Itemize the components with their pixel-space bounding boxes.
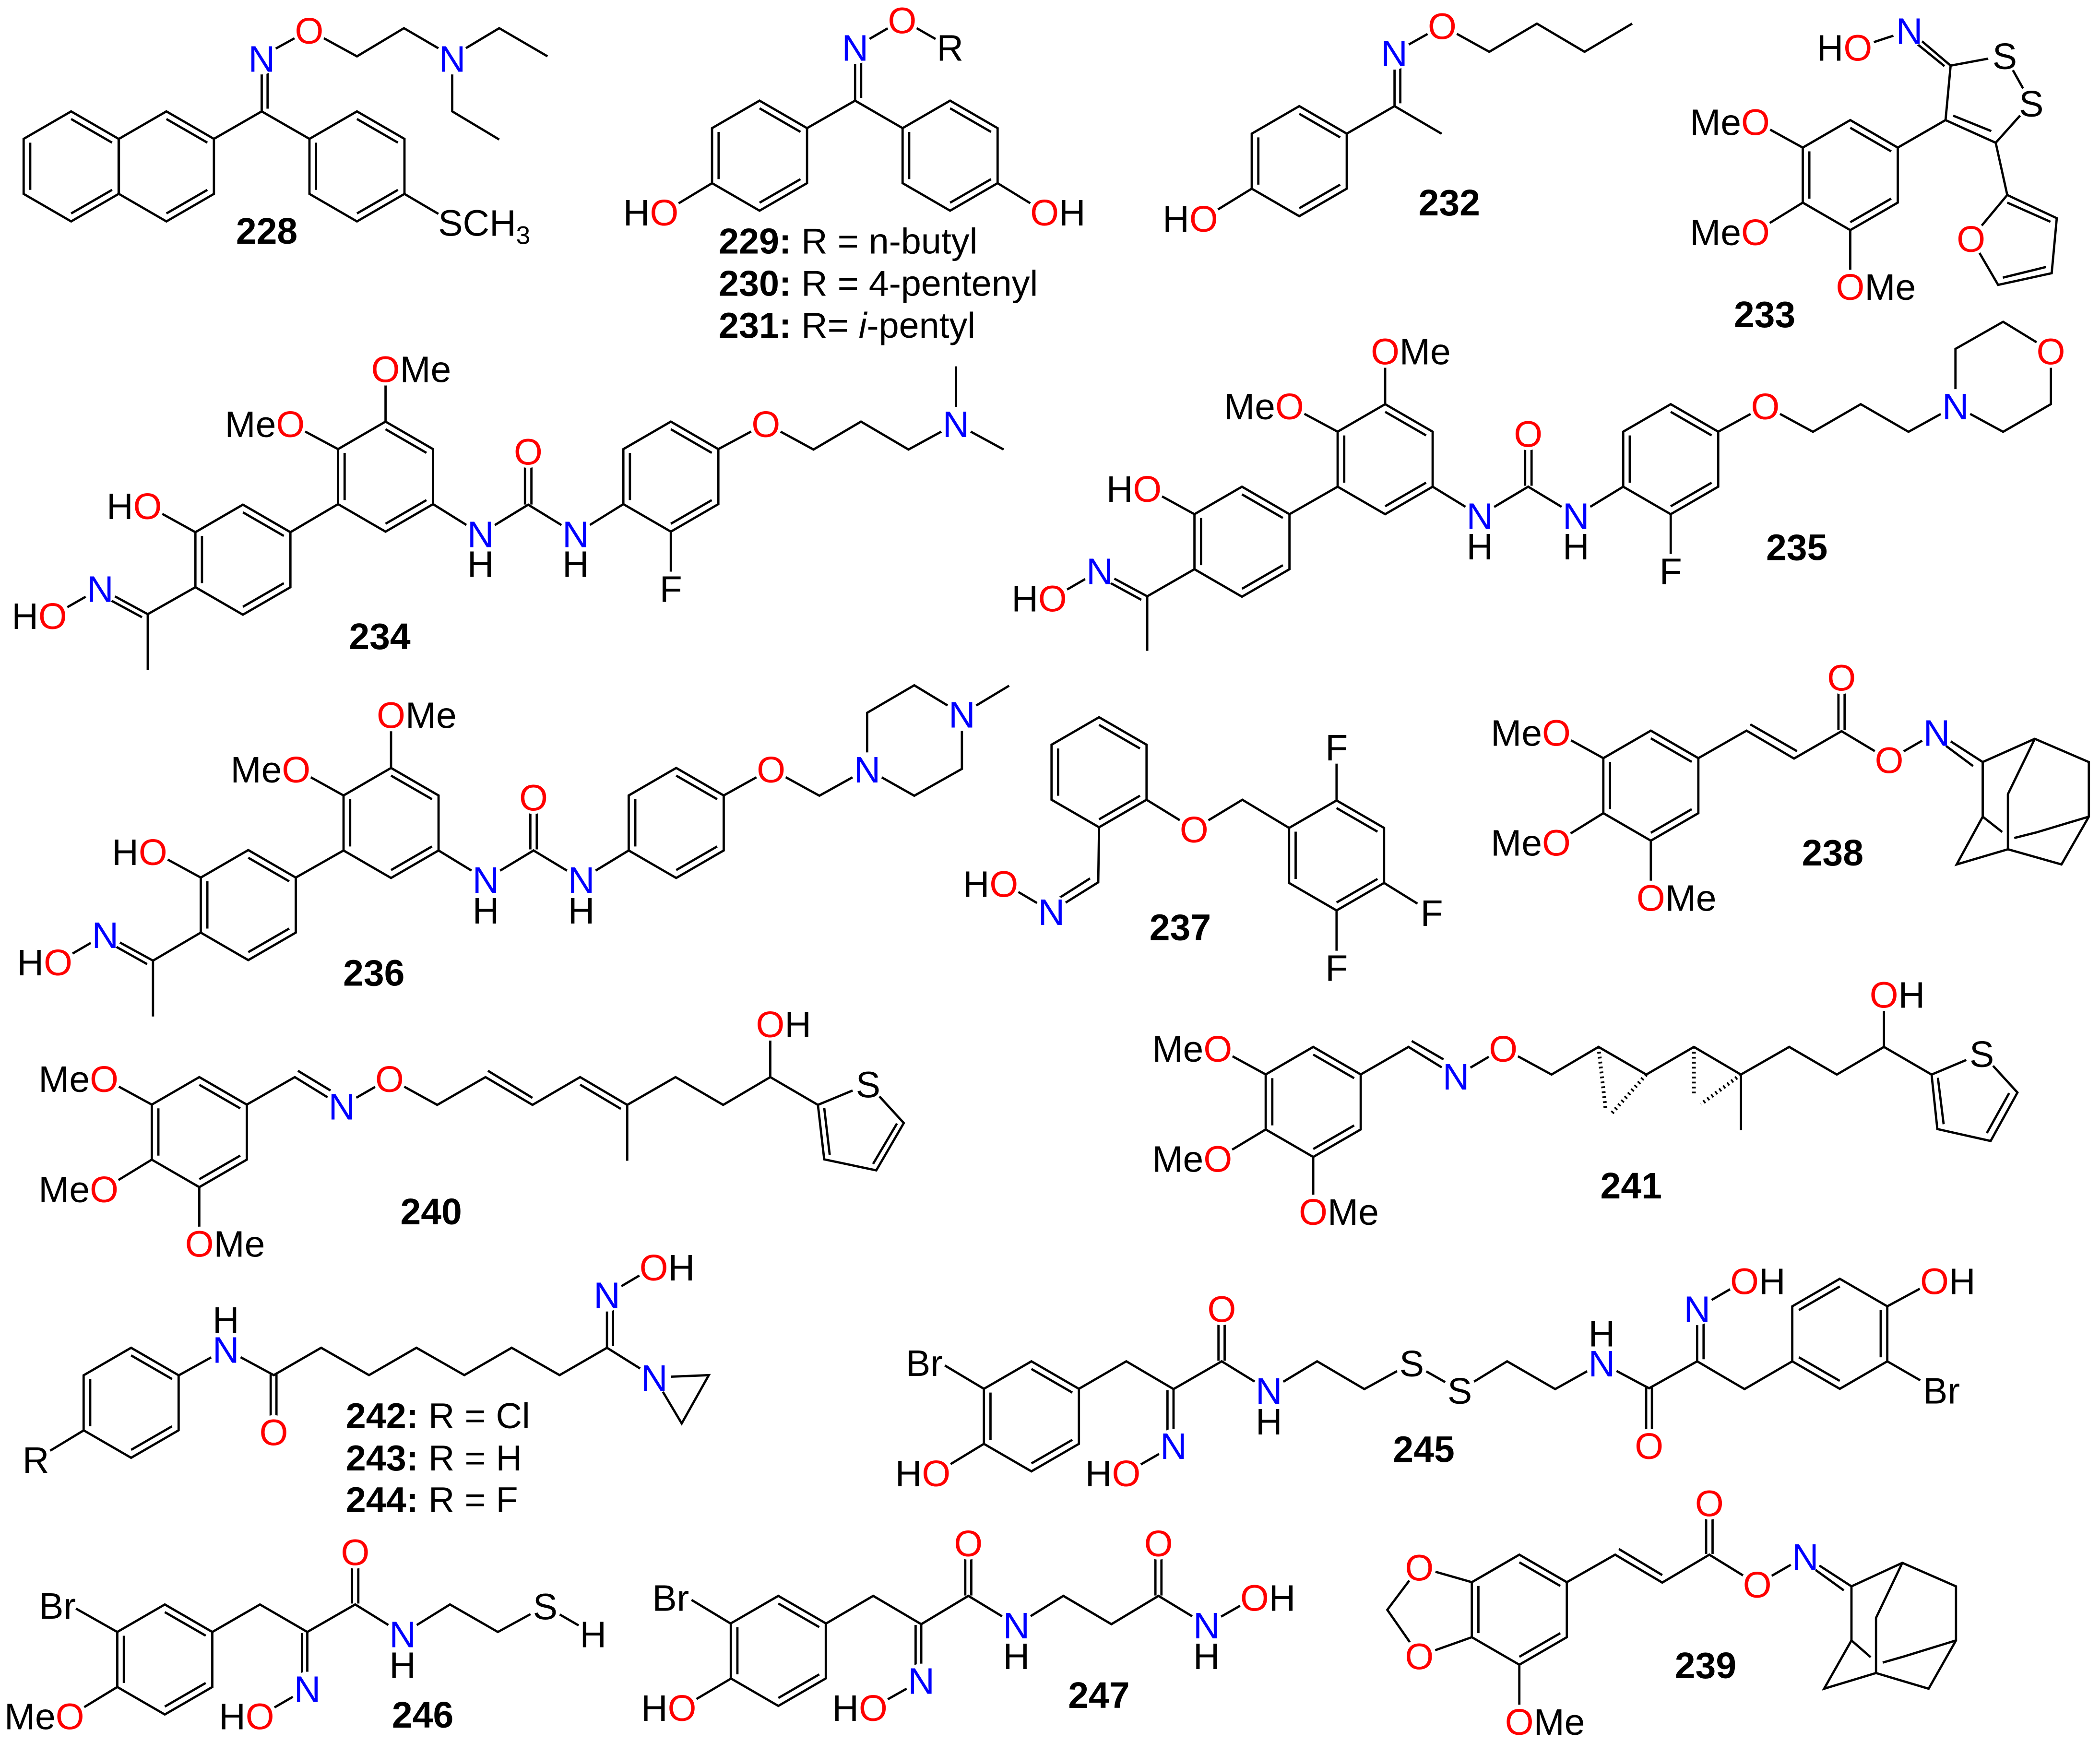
atom labels of 233: MeO xyxy=(1690,102,1770,143)
atom labels of 232 xyxy=(1163,6,1457,240)
atom labels of 239 xyxy=(1405,1483,1819,1742)
atom labels of 229-231: OH xyxy=(1030,192,1086,234)
atom labels of 233: N xyxy=(1896,11,1922,52)
atom labels of 236: O xyxy=(757,749,785,791)
atom labels of 234 xyxy=(12,349,969,637)
atom labels of 236: OMe xyxy=(377,695,457,736)
bonds of 233 xyxy=(1756,30,2057,286)
compound legend 229-231: 229: R = n-butyl xyxy=(719,222,977,262)
atom labels of 235: O xyxy=(1514,414,1542,455)
atom labels of 239: O xyxy=(1743,1564,1772,1606)
atom labels of 240: OH xyxy=(756,1004,811,1045)
compound legend 242-244: 243: R = H xyxy=(346,1438,522,1479)
compound number 246: 246 xyxy=(392,1695,453,1736)
compound legend 229-231 xyxy=(719,222,1038,346)
atom labels of 236: N xyxy=(568,860,594,901)
atom labels of 235: N xyxy=(1466,496,1493,537)
atom labels of 234: H xyxy=(562,544,589,585)
atom labels of 235: H xyxy=(1466,526,1493,568)
atom labels of 228 xyxy=(249,11,530,249)
atom labels of 235: HO xyxy=(1011,578,1067,619)
molecule 242-244 xyxy=(19,1247,709,1520)
molecule 241 xyxy=(1152,975,2017,1233)
cyclopropane hashed bonds xyxy=(1599,1047,1741,1113)
atom labels of 228: SCH xyxy=(438,203,516,244)
atom labels of 240: OMe xyxy=(185,1224,265,1265)
atom labels of 242-244: H xyxy=(213,1300,239,1341)
molecule 236 xyxy=(17,685,1009,1017)
atom labels of 246: H xyxy=(389,1645,416,1686)
compound number 235: 235 xyxy=(1766,527,1827,568)
atom labels of 242-244: OH xyxy=(640,1247,695,1289)
atom labels of 247: N xyxy=(908,1661,935,1702)
atom labels of 228: N xyxy=(439,39,465,80)
atom labels of 233: MeO xyxy=(1690,212,1770,253)
atom labels of 245: S xyxy=(1400,1343,1424,1385)
atom labels of 246 xyxy=(4,1532,606,1737)
atom labels of 246: HO xyxy=(219,1696,274,1737)
compound number 240: 240 xyxy=(401,1191,462,1232)
atom labels of 234: N xyxy=(87,569,114,610)
atom labels of 236: MeO xyxy=(231,749,310,791)
atom labels of 241: O xyxy=(1489,1029,1518,1070)
atom labels of 235: F xyxy=(1660,551,1682,593)
atom labels of 247: HO xyxy=(832,1688,888,1729)
atom labels of 246: S xyxy=(533,1587,558,1628)
atom labels of 241: S xyxy=(1969,1034,1994,1075)
compound number 237: 237 xyxy=(1150,907,1211,948)
atom labels of 234: OMe xyxy=(371,349,451,391)
atom labels of 241: N xyxy=(1443,1056,1469,1098)
atom labels of 234: O xyxy=(751,404,780,445)
atom labels of 235: N xyxy=(1563,496,1590,537)
atom labels of 236: H xyxy=(568,890,594,932)
bonds of 235 xyxy=(1053,322,2051,651)
atom labels of 245: OH xyxy=(1920,1261,1976,1303)
atom labels of 228: 3 xyxy=(516,221,530,249)
atom labels of 247: HO xyxy=(641,1688,697,1729)
molecule 232 xyxy=(1163,6,1632,240)
atom labels of 247: H xyxy=(1003,1636,1030,1677)
compound number 238: 238 xyxy=(1802,832,1863,874)
atom labels of 237 xyxy=(963,727,1443,989)
atom labels of 245: N xyxy=(1589,1343,1615,1385)
atom labels of 239: O xyxy=(1695,1483,1724,1525)
atom labels of 247: N xyxy=(1193,1605,1220,1647)
atom labels of 245: O xyxy=(1207,1289,1236,1330)
compound legend 242-244 xyxy=(346,1396,530,1520)
atom labels of 235: OMe xyxy=(1371,332,1451,373)
molecule 228 xyxy=(24,11,547,252)
bonds of 242-244 xyxy=(36,1267,709,1459)
atom labels of 234: N xyxy=(943,404,969,445)
atom labels of 233: HO xyxy=(1817,28,1872,69)
molecule 246 xyxy=(4,1532,610,1737)
atom labels of 239: O xyxy=(1405,1548,1434,1589)
atom labels of 237: HO xyxy=(963,864,1018,905)
atom labels of 229-231: HO xyxy=(623,192,678,234)
compound legend 242-244: 242: R = Cl xyxy=(346,1396,530,1436)
atom labels of 232: O xyxy=(1428,6,1457,47)
atom labels of 229-231 xyxy=(623,0,1086,234)
bonds of 238 xyxy=(1556,677,2089,898)
atom labels of 234: N xyxy=(467,514,494,556)
atom labels of 234: MeO xyxy=(225,404,305,445)
compound legend 229-231: 230: R = 4-pentenyl xyxy=(719,264,1038,304)
atom labels of 245: O xyxy=(1635,1426,1663,1467)
compound legend 242-244: 244: R = F xyxy=(346,1480,518,1520)
atom labels of 234: F xyxy=(660,569,682,610)
atom labels of 232: N xyxy=(1381,33,1408,74)
compound number 236: 236 xyxy=(343,952,404,994)
atom labels of 238: MeO xyxy=(1491,823,1571,864)
atom labels of 236: O xyxy=(519,778,548,819)
molecule 245 xyxy=(895,1261,1976,1494)
atom labels of 236 xyxy=(17,695,975,984)
atom labels of 236: H xyxy=(473,890,499,932)
atom labels of 235: H xyxy=(1563,526,1590,568)
atom labels of 241: OMe xyxy=(1299,1192,1379,1233)
atom labels of 240: S xyxy=(856,1065,880,1106)
atom labels of 247: O xyxy=(1144,1523,1173,1564)
atom labels of 235: HO xyxy=(1106,469,1162,510)
compound number 247: 247 xyxy=(1068,1675,1130,1716)
bonds of 247 xyxy=(682,1543,1255,1707)
atom labels of 235: MeO xyxy=(1224,386,1304,427)
atom labels of 246: H xyxy=(580,1614,606,1656)
atom labels of 232: HO xyxy=(1163,199,1218,240)
atom labels of 242-244: O xyxy=(260,1412,288,1454)
atom labels of 233: O xyxy=(1957,219,1985,260)
compound legend 229-231: 231: R= i-pentyl xyxy=(719,306,975,346)
compound number 233: 233 xyxy=(1734,294,1795,335)
atom labels of 241: MeO xyxy=(1152,1138,1232,1180)
molecule 229-231 xyxy=(623,0,1086,346)
bonds of 241 xyxy=(1218,995,2017,1211)
atom labels of 245: HO xyxy=(895,1453,950,1494)
atom labels of 241: OH xyxy=(1870,975,1925,1016)
bonds of 229-231 xyxy=(664,20,1044,212)
molecule 235 xyxy=(1011,322,2068,651)
molecule 240 xyxy=(38,1004,904,1265)
atom labels of 247 xyxy=(641,1523,1295,1729)
atom labels of 229-231: R xyxy=(937,28,963,69)
atom labels of 245: H xyxy=(1589,1313,1615,1354)
atom labels of 247: O xyxy=(954,1523,983,1564)
atom labels of 228: O xyxy=(295,11,323,52)
atom labels of 235: N xyxy=(1942,386,1969,427)
atom labels of 235: N xyxy=(1086,551,1113,593)
atom labels of 239: OMe xyxy=(1505,1702,1585,1742)
bonds of 246 xyxy=(70,1552,593,1716)
molecule 233 xyxy=(1690,11,2057,335)
atom labels of 237: F xyxy=(1421,893,1443,934)
atom labels of 247: N xyxy=(1003,1605,1030,1647)
molecule 247 xyxy=(641,1523,1295,1729)
atom labels of 237: F xyxy=(1325,948,1348,989)
atom labels of 240: N xyxy=(329,1086,355,1127)
atom labels of 228: N xyxy=(249,39,275,80)
atom labels of 236: HO xyxy=(112,832,167,873)
atom labels of 241 xyxy=(1152,975,1994,1233)
atom labels of 233 xyxy=(1690,11,2043,308)
atom labels of 245: N xyxy=(1684,1289,1710,1330)
atom labels of 236: N xyxy=(473,860,499,901)
atom labels of 235 xyxy=(1011,332,2065,619)
bonds of 237 xyxy=(1004,717,1432,968)
atom labels of 234: N xyxy=(562,514,589,556)
atom labels of 234: HO xyxy=(12,596,67,637)
atom labels of 245: S xyxy=(1447,1371,1472,1412)
atom labels of 237: F xyxy=(1325,727,1348,769)
atom labels of 242-244: N xyxy=(593,1275,620,1316)
bonds of 234 xyxy=(53,367,1004,670)
atom labels of 233: S xyxy=(1993,36,2017,77)
atom labels of 229-231: O xyxy=(888,0,916,41)
atom labels of 245: N xyxy=(1256,1371,1282,1412)
atom labels of 238: O xyxy=(1875,740,1903,782)
atom labels of 236: N xyxy=(854,749,880,791)
atom labels of 247: OH xyxy=(1240,1578,1295,1619)
atom labels of 238: O xyxy=(1827,658,1856,699)
atom labels of 246: MeO xyxy=(4,1696,84,1737)
atom labels of 246: Br xyxy=(39,1586,76,1627)
atom labels of 245: N xyxy=(1160,1426,1187,1467)
atom labels of 242-244: R xyxy=(23,1440,49,1481)
atom labels of 245: OH xyxy=(1730,1261,1786,1303)
molecule 239 xyxy=(1388,1483,1956,1742)
atom labels of 247: Br xyxy=(652,1577,689,1619)
bonds of 245 xyxy=(936,1279,1934,1473)
atom labels of 241: MeO xyxy=(1152,1029,1232,1070)
atom labels of 240: MeO xyxy=(38,1059,119,1100)
atom labels of 245: Br xyxy=(1923,1370,1960,1411)
atom labels of 238: N xyxy=(1923,712,1950,754)
atom labels of 246: N xyxy=(294,1669,320,1710)
atom labels of 245: Br xyxy=(906,1343,943,1384)
compound number 241: 241 xyxy=(1601,1165,1662,1207)
molecule 237 xyxy=(963,717,1448,989)
molecule 234 xyxy=(12,349,1004,670)
atom labels of 229-231: N xyxy=(842,28,868,69)
bonds of 240 xyxy=(104,1024,904,1244)
atom labels of 234: O xyxy=(514,431,543,473)
atom labels of 235: O xyxy=(1751,386,1780,427)
atom labels of 239: O xyxy=(1405,1636,1434,1677)
compound number 245: 245 xyxy=(1393,1429,1455,1470)
atom labels of 240 xyxy=(38,1004,880,1265)
atom labels of 240: O xyxy=(375,1059,404,1100)
atom labels of 234: H xyxy=(467,544,494,585)
atom labels of 242-244: N xyxy=(213,1329,239,1371)
atom labels of 233: S xyxy=(2019,83,2043,125)
compound number 232: 232 xyxy=(1419,182,1480,224)
atom labels of 238: MeO xyxy=(1491,712,1571,754)
compound number 228: 228 xyxy=(236,211,297,252)
bonds of 228 xyxy=(24,28,547,221)
atom labels of 235: O xyxy=(2037,332,2065,373)
atom labels of 233: OMe xyxy=(1836,267,1916,308)
atom labels of 239: N xyxy=(1792,1537,1819,1578)
atom labels of 245 xyxy=(895,1261,1976,1494)
atom labels of 238 xyxy=(1491,658,1950,919)
atom labels of 237: N xyxy=(1038,892,1065,933)
atom labels of 240: MeO xyxy=(38,1169,119,1210)
atom labels of 247: H xyxy=(1193,1636,1220,1677)
atom labels of 242-244 xyxy=(23,1247,695,1481)
bonds of 239 xyxy=(1388,1503,1956,1721)
bonds of 236 xyxy=(58,685,1009,1017)
atom labels of 242-244: N xyxy=(641,1358,668,1399)
atom labels of 237: O xyxy=(1180,809,1209,851)
compound number 239: 239 xyxy=(1675,1645,1736,1686)
bonds of 232 xyxy=(1204,24,1632,218)
atom labels of 246: O xyxy=(341,1532,369,1574)
atom labels of 236: HO xyxy=(17,942,72,984)
atom labels of 238: OMe xyxy=(1637,878,1717,919)
compound number 234: 234 xyxy=(349,616,411,657)
atom labels of 236: N xyxy=(949,695,975,736)
atom labels of 236: N xyxy=(92,915,119,956)
atom labels of 246: N xyxy=(389,1614,416,1656)
atom labels of 245: HO xyxy=(1085,1453,1140,1494)
atom labels of 245: H xyxy=(1256,1401,1282,1443)
molecule 238 xyxy=(1491,658,2089,919)
atom labels of 234: HO xyxy=(107,486,162,527)
